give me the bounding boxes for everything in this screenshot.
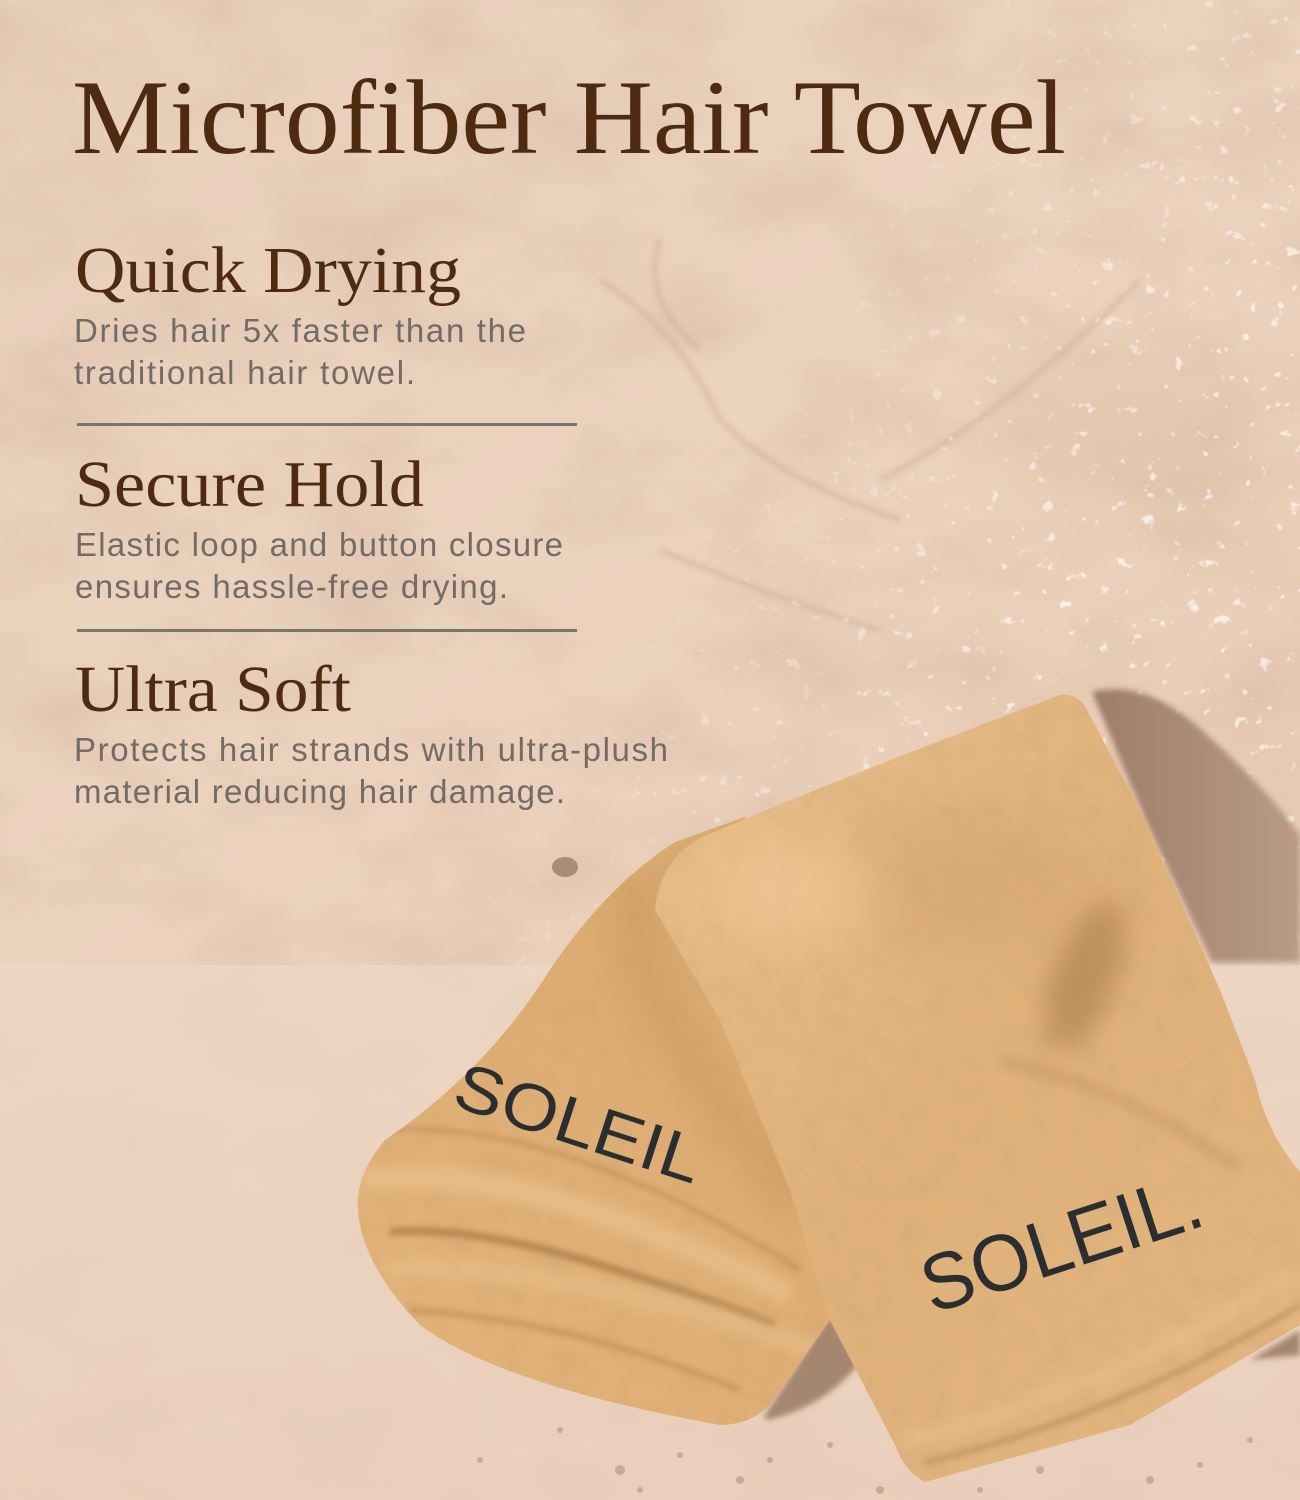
- description: quick drying: [74, 312, 526, 391]
- heading: ultra soft: Ultra Soft: [75, 653, 351, 726]
- description: ultra soft: [74, 731, 668, 810]
- description: quick drying: traditional hair towel.: [74, 354, 415, 391]
- folded towel with logo: [650, 690, 1300, 1490]
- description: ultra soft: material reducing hair damage.: [74, 773, 565, 810]
- feature: quick drying: [74, 234, 526, 391]
- logo: rolled towel: SOLEIL: [446, 1048, 712, 1197]
- towel shadow on wall: [1092, 689, 1300, 962]
- heading: quick drying: Quick Drying: [75, 234, 461, 307]
- title: Microfiber Hair Towel: [72, 59, 1066, 176]
- description: secure hold: ensures hassle-free drying.: [75, 568, 508, 605]
- logo: folded towel: SOLEIL.: [910, 1156, 1213, 1330]
- description: secure hold: Elastic loop and button closure: [75, 526, 563, 563]
- description: ultra soft: Protects hair strands with ultra-plush: [74, 731, 668, 768]
- towel shadow on floor: [765, 1315, 1300, 1420]
- background: stone floor: [0, 965, 1300, 1500]
- rolled towel with logo: [358, 817, 830, 1425]
- heading: secure hold: Secure Hold: [75, 448, 424, 521]
- description: quick drying: Dries hair 5x faster than the: [74, 312, 526, 349]
- background: travertine wall: [0, 0, 1300, 965]
- feature: ultra soft: [74, 653, 668, 810]
- description: secure hold: [75, 526, 563, 605]
- feature: secure hold: [75, 448, 563, 605]
